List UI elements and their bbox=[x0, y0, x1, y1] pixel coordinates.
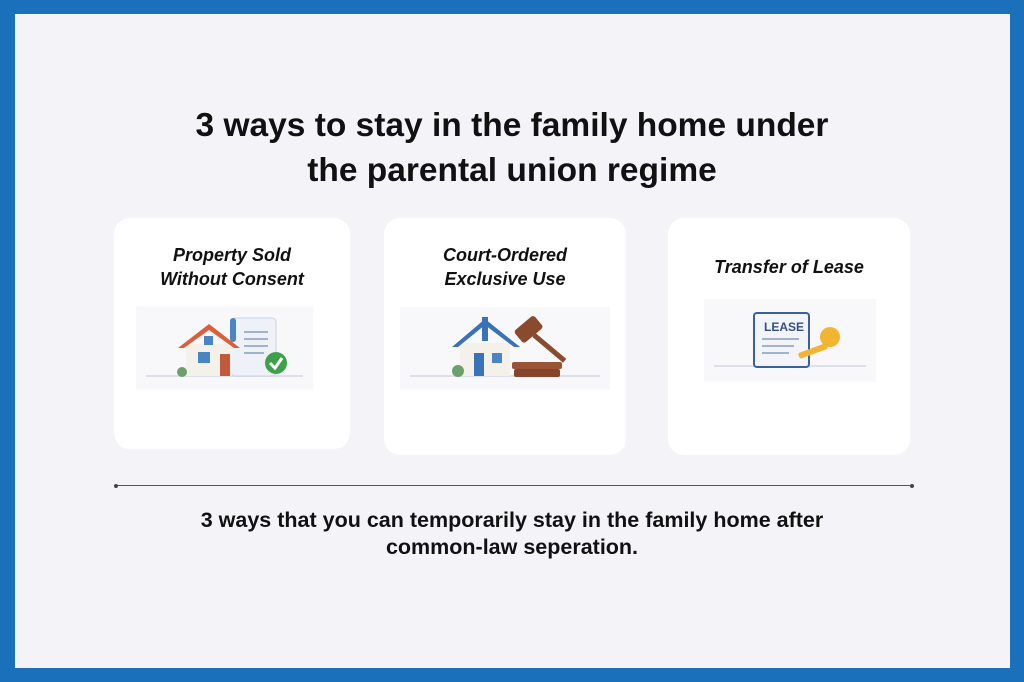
card heading: Court-Ordered bbox=[443, 245, 567, 265]
card heading: Property Sold bbox=[173, 245, 291, 265]
title: the parental union regime bbox=[307, 152, 717, 189]
card heading: Without Consent bbox=[160, 269, 304, 289]
caption: 3 ways that you can temporarily stay in the family home after bbox=[201, 508, 823, 532]
card heading bbox=[443, 245, 568, 289]
icon: house with document and check bbox=[136, 306, 313, 390]
title bbox=[196, 107, 828, 189]
card heading bbox=[160, 245, 304, 289]
title: 3 ways to stay in the family home under bbox=[196, 107, 828, 144]
panel: transfer of lease bbox=[668, 218, 910, 455]
caption: common-law seperation. bbox=[386, 535, 638, 559]
panel: court-ordered exclusive use bbox=[384, 218, 626, 455]
panel: property sold without consent bbox=[114, 218, 350, 449]
icon: lease with key bbox=[704, 299, 876, 382]
card heading: Exclusive Use bbox=[444, 269, 566, 289]
divider line with dots bbox=[114, 484, 914, 488]
icon: lease with key: LEASE bbox=[764, 320, 804, 334]
card heading: Transfer of Lease bbox=[714, 257, 864, 277]
caption bbox=[201, 508, 823, 559]
icon: house with gavel bbox=[400, 307, 610, 390]
